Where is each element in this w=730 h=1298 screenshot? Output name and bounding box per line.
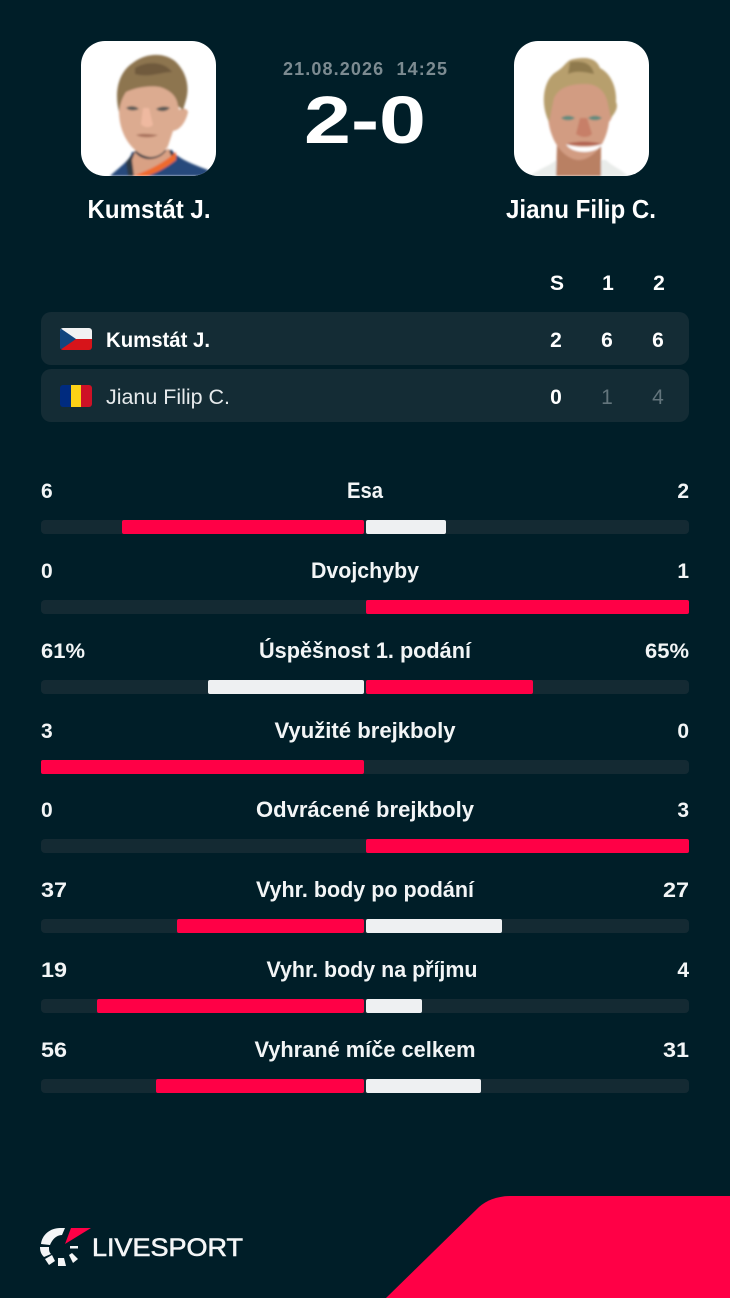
stat: Úspěšnost 1. podání: Úspěšnost 1. podání bbox=[259, 638, 472, 663]
set table header bbox=[550, 272, 665, 295]
stat: Odvrácené brejkboly bbox=[41, 797, 689, 853]
score row: Jianu Filip C.: 0 bbox=[550, 386, 562, 409]
stat: Vyhr. body po podání bbox=[41, 877, 689, 933]
stat: Odvrácené brejkboly: Odvrácené brejkboly bbox=[256, 797, 475, 822]
stat: Vyhrané míče celkem: 31 bbox=[663, 1039, 689, 1062]
score row: Kumstát J.: 2 bbox=[550, 329, 562, 352]
stat: Odvrácené brejkboly: 0 bbox=[41, 799, 53, 822]
stat: Esa bbox=[41, 478, 689, 534]
logo: Livesport: LIVESPORT bbox=[92, 1234, 243, 1262]
stat: Dvojchyby bbox=[41, 558, 689, 614]
score row: Jianu Filip C. bbox=[41, 369, 689, 422]
stat: Úspěšnost 1. podání bbox=[41, 638, 689, 694]
stat: Vyhr. body na příjmu: 4 bbox=[677, 959, 689, 982]
set table header: 2 bbox=[653, 272, 665, 295]
score row: Jianu Filip C.: 4 bbox=[652, 386, 664, 409]
stat: Vyhrané míče celkem: 56 bbox=[41, 1039, 67, 1062]
score row: Kumstát J. bbox=[41, 312, 689, 365]
score row: Kumstát J.: 6 bbox=[601, 329, 613, 352]
set table header: 1 bbox=[602, 272, 614, 295]
set table header: S bbox=[550, 272, 564, 295]
photo: Kumstát J. bbox=[81, 41, 216, 176]
logo: Livesport bbox=[40, 1228, 243, 1266]
stat: Vyhr. body po podání: 37 bbox=[41, 879, 67, 902]
stat: Využité brejkboly bbox=[41, 718, 689, 774]
stat: Vyhrané míče celkem: Vyhrané míče celkem bbox=[254, 1037, 476, 1062]
stat: Úspěšnost 1. podání: 65% bbox=[645, 640, 689, 663]
flag: Romania bbox=[60, 385, 92, 407]
stat: Esa: 2 bbox=[677, 480, 689, 503]
date and time: 21.08.2026 14:25 bbox=[283, 59, 447, 79]
player name: Jianu Filip C.: Jianu Filip C. bbox=[506, 194, 656, 224]
stat: Esa: Esa bbox=[347, 478, 384, 503]
stat: Odvrácené brejkboly: 3 bbox=[677, 799, 689, 822]
stat: Vyhr. body po podání: Vyhr. body po podání bbox=[256, 877, 475, 902]
score row: Kumstát J.: Kumstát J. bbox=[106, 329, 210, 352]
stat: Dvojchyby: 1 bbox=[677, 560, 689, 583]
icon: gauge bbox=[40, 1228, 91, 1266]
stat: Dvojchyby: 0 bbox=[41, 560, 53, 583]
score: 2-0 bbox=[304, 83, 426, 158]
stat: Vyhr. body na příjmu: 19 bbox=[41, 959, 67, 982]
flag: Czech Republic bbox=[60, 328, 92, 350]
stat: Úspěšnost 1. podání: 61% bbox=[41, 640, 85, 663]
stat: Využité brejkboly: 3 bbox=[41, 720, 53, 743]
stat: Vyhr. body po podání: 27 bbox=[663, 879, 689, 902]
player name: Kumstát J.: Kumstát J. bbox=[88, 194, 210, 224]
score row: Jianu Filip C.: 1 bbox=[601, 386, 613, 409]
stat: Vyhr. body na příjmu bbox=[41, 957, 689, 1013]
stat: Využité brejkboly: Využité brejkboly bbox=[274, 718, 456, 743]
score row: Jianu Filip C.: Jianu Filip C. bbox=[106, 386, 230, 409]
stat: Využité brejkboly: 0 bbox=[677, 720, 689, 743]
corner accent shape bbox=[386, 1196, 730, 1298]
stat: Dvojchyby: Dvojchyby bbox=[311, 558, 420, 583]
stat: Esa: 6 bbox=[41, 480, 53, 503]
score row: Kumstát J.: 6 bbox=[652, 329, 664, 352]
stat: Vyhrané míče celkem bbox=[41, 1037, 689, 1093]
stat: Vyhr. body na příjmu: Vyhr. body na příjmu bbox=[266, 957, 478, 982]
photo: Jianu Filip C. bbox=[514, 41, 649, 176]
